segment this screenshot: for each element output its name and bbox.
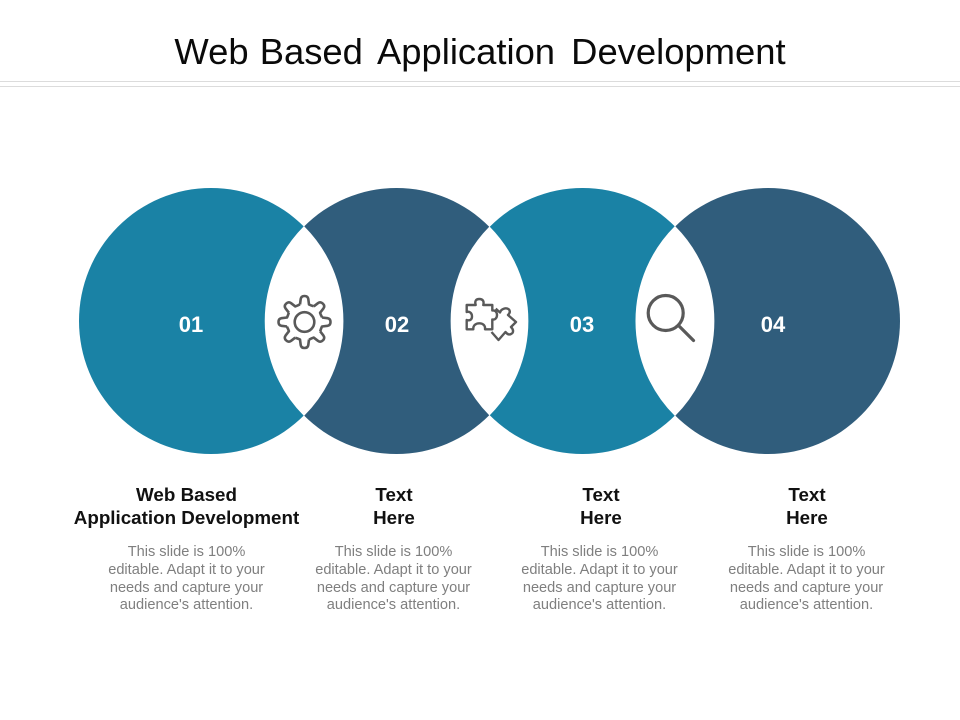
circle 4 — [636, 188, 900, 454]
number 04: 04 — [761, 312, 785, 337]
body text 3: audience's attention. — [533, 597, 666, 613]
icon: gear — [278, 296, 330, 348]
heading 1: Web Based — [136, 484, 237, 505]
body text 2: needs and capture your — [317, 580, 470, 596]
heading 4: Text — [788, 484, 826, 505]
body text 1: audience's attention. — [120, 597, 253, 613]
heading 4 — [786, 484, 828, 528]
lens 2 — [451, 227, 528, 415]
icon: puzzle pieces — [467, 299, 516, 340]
title: Web Based Application Development — [174, 31, 786, 72]
body text 2: This slide is 100% — [335, 544, 452, 560]
heading 2 — [373, 484, 415, 528]
heading 3: Text — [582, 484, 620, 505]
body text 2: editable. Adapt it to your — [315, 562, 472, 578]
body text 4: editable. Adapt it to your — [728, 562, 885, 578]
icon: magnifier — [648, 296, 694, 340]
heading 1: Application Development — [74, 507, 299, 528]
heading 3 — [580, 484, 622, 528]
body text 1 — [108, 544, 265, 613]
number 02: 02 — [385, 312, 409, 337]
heading 3: Here — [580, 507, 622, 528]
heading 2: Text — [375, 484, 413, 505]
body text 3: This slide is 100% — [541, 544, 658, 560]
body text 2 — [315, 544, 472, 613]
body text 3: needs and capture your — [523, 580, 676, 596]
body text 4: This slide is 100% — [748, 544, 865, 560]
number 01: 01 — [179, 312, 203, 337]
heading 4: Here — [786, 507, 828, 528]
body text 1: editable. Adapt it to your — [108, 562, 265, 578]
heading 1 — [74, 484, 300, 528]
body text 1: This slide is 100% — [128, 544, 245, 560]
body text 3: editable. Adapt it to your — [521, 562, 678, 578]
heading 2: Here — [373, 507, 415, 528]
lens 1 — [265, 227, 343, 415]
body text 4 — [728, 544, 885, 613]
circle 3 — [451, 188, 714, 454]
lens 3 — [636, 226, 714, 416]
circle 1 — [79, 188, 343, 454]
body text 4: audience's attention. — [740, 597, 873, 613]
body text 3 — [521, 544, 678, 613]
number 03: 03 — [570, 312, 594, 337]
body text 2: audience's attention. — [327, 597, 460, 613]
circle 2 — [265, 188, 528, 454]
body text 4: needs and capture your — [730, 580, 883, 596]
body text 1: needs and capture your — [110, 580, 263, 596]
